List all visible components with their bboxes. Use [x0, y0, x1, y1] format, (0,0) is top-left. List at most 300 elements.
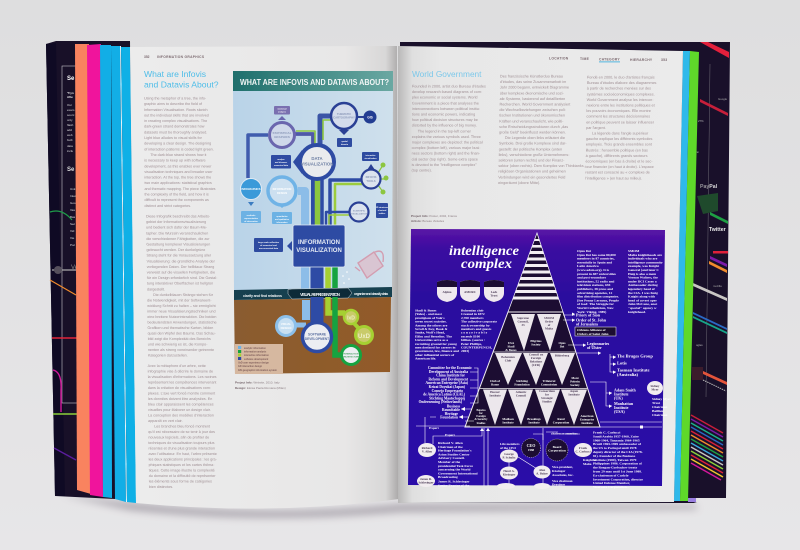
- text: SMOM: Vernon Walters, the: [628, 276, 658, 280]
- pyramid lower tiers: Enterprise: [580, 418, 595, 422]
- people ovals: V. Allen: [422, 450, 432, 454]
- node: information design: INFORMATION: [273, 187, 291, 191]
- text: SMOM: Malta knighthoods are: [628, 253, 662, 257]
- text: committees list: Foundation: [440, 416, 458, 420]
- fold-out poster: left edge: data: [67, 144, 73, 148]
- text: Bohemian club: COUNTERPUNCH,: [461, 346, 492, 350]
- text: SMOM: Knight along with: [628, 295, 655, 299]
- English body text, left page: in creating complex visualisations. The: [144, 119, 207, 123]
- right-hand pyramid labels: (USA): [614, 409, 625, 414]
- French body text, left page: récentes et d'une plus grande interaction: [148, 447, 215, 450]
- text: miscellaneous captions: Kissinger: [552, 469, 566, 473]
- English column, right page: major complexes are depicted: the political: [412, 141, 483, 144]
- fold-out poster: left edge: Afte: [67, 95, 73, 99]
- German body text, left page: und bedient sich dafür der Baum-Me-: [146, 226, 208, 230]
- French column, right page: restant est consacré au « complexe de: [585, 171, 650, 175]
- fold-out poster: left edge: "Fyn: [67, 91, 74, 95]
- people ovals: Sidney: [651, 384, 660, 388]
- node: information visualization: VISUALIZATION: [296, 248, 342, 254]
- English column, right page: is devoted to the "intelligence complex": [412, 163, 477, 167]
- banner: visual representation: clarify and find relations: [243, 293, 282, 298]
- text: Opus Dei: institutions, 52 radio and: [577, 279, 614, 283]
- English column, right page: Government is a piece that analyses the: [412, 101, 479, 105]
- German body text, left page: vorliegenden Daten. Der hellblaue Strang: [147, 265, 214, 269]
- text: Skull and Bones: Elihu and Berzelius. The: [415, 334, 452, 338]
- French body text, left page: Avec la métaphore d'un arbre, cette: [148, 364, 206, 368]
- text: Bohemian club: 2,700 members: [461, 316, 484, 320]
- German column, right page: Die Legende oben links erläutert die: [505, 136, 565, 140]
- French body text, left page: les éléments sous forme de catégories: [149, 480, 212, 483]
- node: data visualization: [271, 145, 334, 179]
- left page running header: 352: [144, 55, 150, 59]
- text: Opus Dei: Latin America: [577, 264, 599, 268]
- fold-out poster: right edge: 27%: [698, 119, 704, 123]
- node: statistical graphics: statistical: [277, 108, 287, 111]
- legend: [235, 344, 283, 374]
- fold-out poster: right edge: ogles: [696, 343, 703, 347]
- banner: visual representation: organize and classify data: [354, 291, 389, 296]
- book shadow: [60, 495, 698, 518]
- German body text, left page: wicklung Schritt zu halten – sie ermöglicht: [147, 304, 216, 308]
- text: SMOM: Haig is also a mem: [628, 272, 656, 276]
- node: data visualization: VISUALIZATION: [301, 162, 333, 166]
- text: Frank C. Carlucci: Institute (1980), Taiwan 1979: [593, 458, 637, 462]
- people ovals: Alan: [539, 468, 545, 472]
- French column, right page: économiques (en bas à droite) et le sec-: [586, 160, 653, 163]
- pyramid lower tiers: Council on: [529, 352, 543, 356]
- text: SMOM: John McCone, anot: [628, 302, 658, 306]
- node: scientific visualization: entities: [379, 212, 385, 215]
- text: SMOM: legendary head of: [628, 287, 655, 291]
- fold-out poster: left edge: [46, 41, 135, 500]
- node: infographics: representation: [244, 217, 259, 220]
- left infographic caption: Project Info: Website, 2010, Italy: [235, 380, 280, 384]
- English body text, left page: Using the metaphor of a tree, the info-: [144, 97, 207, 100]
- node: thematic cartography: CARTOGRAPHY: [333, 116, 355, 120]
- poster header banner: WHAT ARE INFOVIS AND DATAVIS ABOUT?: [240, 77, 389, 87]
- English body text, left page: dark-green strand demonstrates how: [144, 125, 205, 129]
- node: scientific visualization: [350, 202, 388, 222]
- node: data visualization: analyze: [277, 159, 285, 161]
- right-hand pyramid labels: Chairman: [652, 413, 667, 417]
- French column, right page: à gauche), différents grands secteurs: [586, 154, 648, 158]
- right page navigation header: HIERARCHY: [630, 58, 653, 62]
- English body text, left page: The dark-blue strand shows how it: [150, 153, 206, 157]
- German column, right page: gestellt: der politische Komplex (unten: [499, 147, 562, 151]
- node: data visualization: and discover: [275, 162, 287, 164]
- fold-out poster: right edge: on: [696, 150, 700, 154]
- text: Opus Dei: Opus Dei has some 80,000: [577, 253, 616, 257]
- fold-out poster: left edge: add: [67, 128, 72, 132]
- node: infovis tools: TOOLS: [366, 179, 376, 183]
- text: committees list: Keizai Doyukai (Japan): [429, 385, 466, 389]
- legend: interactive information: [244, 354, 269, 357]
- French body text, left page: la visualisation d'informations. Les racines: [148, 375, 217, 379]
- text: Bohemian club: c o n c e i v a b l y: [461, 331, 487, 335]
- node: data visualization: numerical data: [274, 164, 289, 167]
- text: committees list: Development of Australia: [429, 370, 468, 374]
- English column, right page: how political decision structures may be: [412, 118, 478, 122]
- infographic: intelligence complex poster: [408, 229, 672, 489]
- right-hand pyramid labels: of Jerusalem: [576, 322, 599, 326]
- English body text, left page: of interaction patterns is coded light green.: [144, 147, 214, 151]
- node: UxD: UxD: [358, 334, 371, 340]
- English body text, left page: Light blue alludes to visual skills for: [144, 136, 203, 140]
- text: Richard V. Allen: Heritage Foundation's: [438, 449, 472, 453]
- pyramid lower tiers: Order: [545, 320, 554, 324]
- English column, right page: develop research-based diagrams of com-: [412, 90, 483, 94]
- striped pyramid top: [508, 232, 564, 312]
- fold-out poster: left edge: Vas: [70, 208, 75, 212]
- poster title: complex: [461, 257, 512, 272]
- node: information design: [268, 177, 296, 224]
- English column, right page: plex economic or social systems. World: [412, 96, 478, 100]
- fold-out poster: right edge: Twitter: [709, 227, 726, 233]
- node: interaction architecture: [342, 346, 360, 364]
- text: Richard V. Allen: Chairman of the: [438, 445, 463, 449]
- pyramid lower tiers: Hoover: [490, 390, 501, 394]
- German column, right page: sche Entscheidungsstrukturen durch „das: [499, 125, 568, 129]
- pyramid lower tiers: Consortium: [539, 389, 555, 393]
- pyramid lower tiers: Bilderberg: [555, 354, 570, 358]
- pyramid lower tiers: Studies: [542, 400, 553, 404]
- pyramid lower tiers: Institute: [568, 392, 580, 396]
- text: Opus Dei: essentially in Spain and: [577, 260, 612, 264]
- node: IxD: IxD: [347, 316, 355, 322]
- text: Richard V. Allen: Government International: [438, 471, 478, 475]
- text: Opus Dei: Opus Dei: [577, 249, 591, 253]
- French column, right page: nexions entre les institutions politiques et: [586, 104, 656, 107]
- English column, right page: complex (bottom left), various major busi-: [412, 146, 481, 150]
- English body text, left page: developing a clear design. The designing: [144, 142, 211, 146]
- text: Opus Dei: (www.adsm.org). It is: [577, 268, 610, 272]
- fold-out poster: left edge: Vie: [70, 236, 75, 240]
- node: GIS: [357, 110, 376, 124]
- text: Frank C. Carlucci: United Defense Member,: [593, 481, 630, 485]
- banner: visual representation: VISUAL REPRESENTATION: [300, 292, 340, 297]
- English body text, left page: development, as this enables ever newer: [144, 164, 212, 168]
- French body text, left page: nouveaux logiciels, afin de profiter de: [148, 436, 209, 439]
- German body text, left page: bedeutendsten Anwendungen, statistische: [147, 320, 217, 324]
- node: visual design: [276, 316, 296, 336]
- node: visual design: VISUAL: [281, 322, 291, 326]
- text: Frank C. Carlucci: Frank C. Carlucci: [593, 430, 620, 434]
- text: Frank C. Carlucci: Ex-chairman of Carlyle: [593, 473, 629, 477]
- tree trunk and branches: [248, 116, 386, 355]
- text: committees list: Consejo Empresario: [432, 389, 463, 393]
- English body text, left page: distinct and strict categories.: [145, 204, 191, 208]
- node: infographics: [240, 178, 262, 223]
- French body text, left page: bien distinctes.: [149, 485, 173, 489]
- node: scientific visualization: SCIENTIFIC: [353, 210, 365, 212]
- English column, right page: interconnections between political institu-: [412, 107, 481, 111]
- text: Opus Dei: World Catholicism, New: [577, 306, 614, 310]
- fold-out poster: right edge: mozilla: [713, 284, 722, 288]
- CEO and Board seals: Corporation: [548, 448, 566, 452]
- text: committees list: Roundtable: [442, 408, 460, 412]
- node: software development: [302, 322, 332, 352]
- German body text, left page: immer neue Visualisierungstechniken und: [147, 309, 216, 313]
- English column, right page: The legend in the top-left corner: [418, 129, 472, 133]
- pyramid lower tiers: Pilgrims: [530, 339, 542, 343]
- pyramid lower tiers: Strategic: [541, 396, 554, 400]
- pyramid lower tiers: Council,: [517, 320, 529, 324]
- pyramid lower tiers: Foundation: [514, 382, 530, 386]
- English body text, left page: interaction. At the top, the tree shows the: [144, 176, 211, 180]
- German body text, left page: quasi den Wipfel des Baums. Das Schau-: [148, 331, 216, 335]
- German column, right page: Recherchen. World Government analysiert: [499, 103, 571, 106]
- right-hand pyramid labels: Lotis: [617, 360, 627, 366]
- text: Skull and Bones: seven secret societies.: [415, 320, 447, 324]
- French body text, left page: visuelles pour élaborer un design clair.: [148, 408, 211, 412]
- fold-out poster: right edge: [400, 42, 730, 503]
- English column, right page: distorted by the influence of big money.: [412, 124, 477, 128]
- text: Frank C. Carlucci: Saudi Arabia 1957-1960, Zaire: [593, 434, 639, 438]
- French body text, left page: dans la création de visualisations com-: [148, 386, 212, 390]
- text: Richard V. Allen: James R. Schlesinger: [438, 480, 470, 484]
- text: Frank C. Carlucci: Westvaco Corporation...: [593, 485, 629, 489]
- right-hand pyramid labels: (Australia): [617, 372, 638, 377]
- pyramid lower tiers: Society: [570, 383, 580, 387]
- German body text, left page: verweist auf die visuellen Fertigkeiten, die: [147, 271, 215, 274]
- French body text, left page: du domaine et la difficulté de représenter: [149, 474, 216, 478]
- German body text, left page: bild zeigt die Komplexität des Bereichs: [148, 337, 211, 341]
- text: committees list: Committee for the Economic: [428, 366, 472, 370]
- poster title: [449, 244, 519, 272]
- text: Skull and Bones: Among the others are: [415, 323, 448, 327]
- German column, right page: sektor (oben rechts). Dem Komplex von Thinktanks,: [498, 164, 585, 168]
- right-hand pyramid labels: Tasman Institute: [617, 368, 649, 372]
- French column, right page: systèmes socioéconomiques complexes.: [587, 92, 655, 96]
- CEO and Board seals: CEO: [527, 443, 535, 448]
- German body text, left page: gebraucht werden. Der dunkelgrüne: [146, 248, 205, 252]
- people ovals: A. Baker: [536, 472, 549, 476]
- text: SMOM: General (and later C: [628, 268, 659, 272]
- node: infographics: INFOGRAPHICS: [241, 188, 261, 191]
- text: Skull and Bones: Scroll & Key, Book &: [415, 327, 448, 331]
- pyramid lower tiers: Malta: [545, 326, 553, 330]
- node: information visualization: large-scale collection: [258, 241, 280, 244]
- German column, right page: ale Systeme, basierend auf detaillierten: [500, 97, 565, 101]
- French body text, left page: phiques statistiques et les cartes théma-: [149, 463, 215, 467]
- pyramid lower tiers: Society: [531, 342, 541, 346]
- pyramid lower tiers: Relations: [530, 360, 543, 364]
- text: Richard V. Allen: Broadcasting: [438, 475, 458, 479]
- fold-out poster: left edge: sourc: [67, 113, 75, 117]
- text: committees list: Business: [447, 404, 461, 408]
- German body text, left page: Strang steht für die Voraussetzung aller: [147, 254, 212, 258]
- pyramid lower tiers: USA: [508, 341, 515, 345]
- left page: [130, 46, 399, 509]
- French body text, left page: plexes. L'axe vert foncé montre comment: [148, 392, 215, 395]
- right-hand pyramid labels: Legionnaries: [587, 341, 610, 346]
- text: Richard V. Allen: Member of the: [438, 460, 461, 464]
- legend: UxD user experience design: [238, 362, 269, 364]
- pyramid lower tiers: SMOM: [544, 316, 554, 320]
- pyramid lower tiers: Supreme: [517, 316, 530, 320]
- fold-out poster: left edge: exam: [67, 108, 75, 112]
- text: Richard V. Allen: Senior Fractor of the: [438, 483, 470, 487]
- German body text, left page: und wie schwierig es ist, die Kompo-: [148, 342, 208, 346]
- right page: [398, 46, 683, 503]
- pyramid lower tiers: Corporation: [553, 420, 570, 424]
- node: statistical graphics: GRAPHICS: [274, 135, 290, 139]
- text: Opus Dei: present in 487 universities: [577, 272, 617, 276]
- people ovals: Richard: [422, 446, 433, 450]
- German column, right page: links), verschiedene große Unternehmens-: [499, 153, 570, 157]
- poster header banner: [233, 71, 393, 91]
- German column, right page: Verbindungen wird ein gesondertes Feld: [498, 175, 565, 179]
- German body text, left page: Diese Infografik beschreibt das Arbeits-: [146, 215, 211, 218]
- text: Bohemian club: The collective corporate: [461, 320, 497, 324]
- text: Bohemian club: Bohemian club: [461, 308, 484, 312]
- right page navigation header: LOCATION: [549, 56, 569, 60]
- node: data visualization: DATA: [311, 156, 323, 161]
- text: committees list: Reform and Development: [428, 377, 469, 381]
- text: SMOM: individuals who are: [628, 257, 658, 261]
- people ovals: C. Carlucci: [575, 450, 591, 454]
- right-hand pyramid labels: The Bruges Group: [617, 354, 653, 358]
- pyramid lower tiers: Council: [516, 394, 526, 398]
- text: Skull and Bones: Skull & Bones: [415, 308, 437, 312]
- English body text, left page: out the individual skills that are involved: [144, 113, 209, 117]
- node: thematic cartography: [331, 103, 357, 147]
- German body text, left page: tapher. Die Wurzeln veranschaulichen: [146, 231, 208, 235]
- node: infovis tools: visualization: [364, 157, 377, 160]
- French column, right page: Bureau d'études élabore des diagrammes: [587, 81, 657, 85]
- right-hand pyramid labels: Adam Smith: [614, 388, 636, 392]
- right-hand pyramid labels: Institute: [614, 392, 629, 396]
- text: Frank C. Carlucci: Investment Corporation, director: [593, 477, 643, 481]
- text: Skull and Bones: Snake, Wolf's Head,: [415, 331, 445, 335]
- right-hand pyramid labels: Institute: [614, 405, 629, 410]
- text: Expert labels: Expert: [429, 426, 440, 430]
- right-hand pyramid labels: Orléans Alliance of: [577, 328, 606, 332]
- text: Skull and Bones: other influential sectors of: [415, 353, 455, 357]
- English body text, left page: the complexity of the field, and how it is: [144, 193, 209, 197]
- text: Frank C. Carlucci: 81). Founder of the Business: [593, 454, 636, 458]
- English column, right page: tions and economic powers, indicating: [412, 113, 475, 116]
- heading: World Government: World Government: [412, 69, 482, 79]
- English body text, left page: visualisation techniques and broader user: [144, 170, 213, 174]
- text: miscellaneous captions: Vice chairman: [552, 479, 573, 483]
- right page navigation header: [549, 56, 667, 62]
- German body text, left page: Visualisierung: die gründliche Analyse der: [147, 259, 216, 263]
- text: Richard V. Allen: Asian Studies Center: [438, 452, 470, 456]
- soil area: [234, 297, 391, 374]
- English column, right page: Founded in 2000, artist duo Bureau d'études: [412, 85, 486, 88]
- text: miscellaneous captions: of the CEO: [500, 446, 516, 450]
- fold-out poster: left edge: Se: [67, 167, 75, 173]
- node: infographics: of information: [244, 220, 258, 223]
- node: interaction architecture: INTERACTION: [344, 352, 359, 356]
- text: miscellaneous captions: Dresdner: [552, 482, 566, 486]
- right-hand pyramid labels: Order of St. John: [576, 318, 607, 322]
- German column, right page: die Wechselbeziehungen zwischen poli-: [499, 108, 567, 112]
- text: miscellaneous captions: Knight of: [583, 458, 597, 462]
- pyramid lower tiers: Stichting: [516, 379, 528, 383]
- German column, right page: Jahr 2000 begann, entwickelt Diagramme: [500, 86, 569, 90]
- node: scientific visualization: of natural: [378, 209, 387, 212]
- French body text, left page: tiques. Cette image illustre la complexité: [149, 469, 215, 472]
- node: statistical graphics: [270, 106, 294, 148]
- node: infographics: aesthetic: [247, 214, 256, 217]
- node: information design: DESIGN: [277, 191, 287, 195]
- fold-out poster: right edge: Google: [718, 97, 727, 101]
- text: SMOM: under DCI Casey a: [628, 279, 657, 283]
- shields: Lods: [491, 290, 498, 294]
- French body text, left page: Les branches bleu foncé montrent: [154, 425, 210, 428]
- pyramid lower tiers: Rand: [557, 417, 565, 421]
- node: visual design: DESIGN: [281, 326, 291, 330]
- node: thematic cartography: spatial: [341, 140, 348, 143]
- text: Frank C. Carlucci: deputy director of the CIA (1978-: [593, 450, 644, 454]
- right-hand pyramid labels: Sidney Myer: [652, 397, 672, 401]
- text: Bohemian club: exceeds $100: [461, 334, 480, 338]
- German column, right page: sektoren (unten rechts) und der Finanz-: [499, 159, 565, 162]
- pyramid lower tiers: Institute: [502, 420, 514, 424]
- French column, right page: La légende dans l'angle supérieur: [592, 132, 649, 135]
- pyramid lower tiers: Commission: [541, 382, 557, 386]
- pyramid lower tiers: Skull: [508, 344, 515, 348]
- fold-out poster: left edge: built: [67, 138, 73, 142]
- text: Skull and Bones: recruiting ground for young: [415, 342, 457, 346]
- shields: Trust: [490, 294, 499, 298]
- text: SMOM: the CIA. I was Knig: [628, 291, 658, 295]
- legend: information analysis: [244, 350, 267, 354]
- English body text, left page: and thematic mapping. The piece illustrates: [144, 187, 216, 191]
- node: software development: DEVELOPMENT: [305, 337, 329, 341]
- text: Skull and Bones: prestigious of Yale's: [415, 316, 445, 320]
- pyramid lower tiers: Atlantic: [516, 390, 527, 394]
- French column, right page: World Government analyse les intercon-: [587, 98, 654, 102]
- French column, right page: Fondé en 2000, le duo d'artistes français: [587, 76, 655, 79]
- right page navigation header: 353: [661, 58, 667, 62]
- text: miscellaneous captions: Vice-president,: [552, 465, 573, 469]
- heading: What are Infovis: What are Infovis: [144, 69, 206, 79]
- English column, right page: ness sectors (bottom right) and the finan-: [412, 152, 481, 156]
- shields: AMORC: [464, 290, 476, 294]
- text: miscellaneous captions: Associates, Inc.: [552, 473, 574, 477]
- node: thematic cartography: domain: [341, 144, 349, 146]
- node: software development: SOFTWARE: [308, 332, 326, 336]
- English column, right page: explains the various symbols used. Three: [412, 135, 481, 139]
- text: Bohemian club: Peter Phillips,: [461, 342, 482, 346]
- pyramid lower tiers: Institute: [581, 421, 593, 425]
- fold-out poster: left edge: only: [67, 118, 73, 122]
- French column, right page: l'intelligence » (en haut au milieu).: [585, 176, 642, 180]
- pyramid lower tiers: & Security: [475, 418, 488, 421]
- fold-out poster: left edge: Poc: [70, 243, 76, 247]
- text: Opus Dei: film distribution companies.: [577, 295, 619, 299]
- fold-out poster: left edge: Bas: [70, 215, 76, 219]
- legend: GIS geographic information system: [238, 369, 277, 372]
- legend: software development: [244, 358, 268, 361]
- fold-out poster: right edge: PayPal: [700, 184, 718, 190]
- pyramid lower tiers: Rome: [491, 382, 499, 386]
- text: Expert labels: [429, 426, 456, 437]
- text: Bohemian club: members and guests: [461, 327, 492, 331]
- pyramid lower tiers: Brookings: [527, 417, 542, 421]
- text: committees list: Stichting Maatschappij: [429, 396, 465, 400]
- left infographic caption: [235, 380, 286, 390]
- pyramid lower tiers: for: [479, 412, 484, 415]
- shields: Alpina: [443, 290, 452, 294]
- text: Skull and Bones: Universities serve as a: [415, 338, 448, 342]
- people ovals: Schlesinger: [418, 480, 434, 484]
- right infographic caption: Artists: Bureau d'études: [411, 219, 445, 223]
- node: information design: quantitative: [276, 215, 288, 218]
